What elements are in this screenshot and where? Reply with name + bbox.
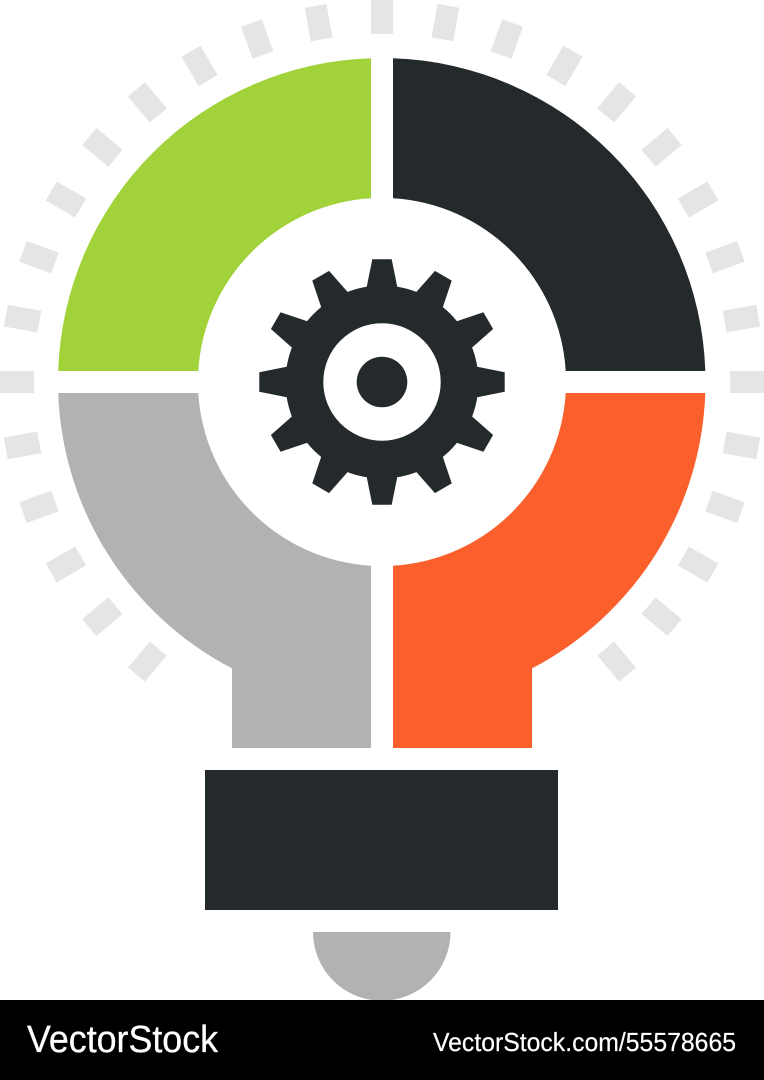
bulb segment: green top-left <box>58 58 371 371</box>
light rays around the bulb <box>0 0 764 682</box>
icon: gear <box>259 259 505 505</box>
watermark url text: VectorStock.com/55578665 <box>433 1027 736 1057</box>
bulb segment: orange bottom-right with neck <box>393 393 705 748</box>
bulb base: dark rectangle <box>205 770 558 910</box>
watermark logo text: VectorStock <box>27 1019 219 1061</box>
bulb segment: dark top-right <box>393 58 705 371</box>
watermark bar <box>0 1000 764 1080</box>
bulb tip: gray half circle <box>313 932 450 1001</box>
bulb segment: gray bottom-left with neck <box>58 393 371 748</box>
